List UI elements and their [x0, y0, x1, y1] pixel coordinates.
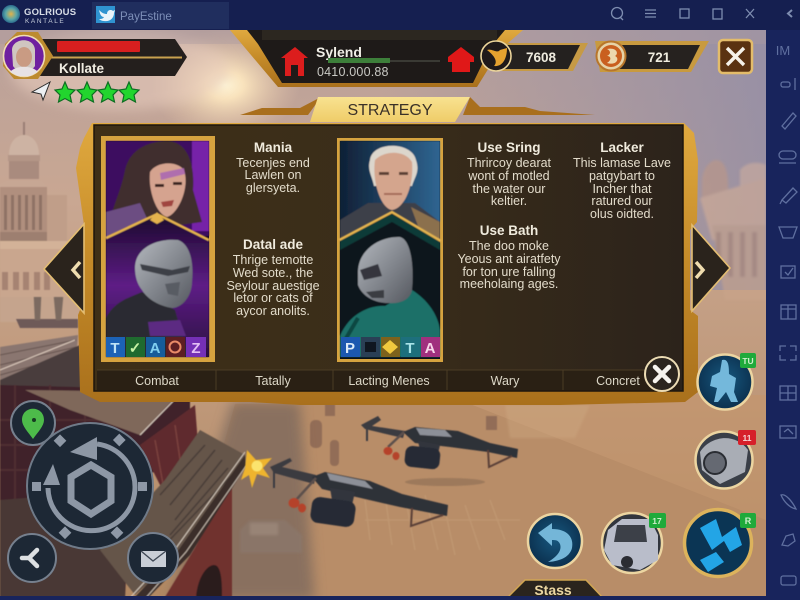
portrait: old man [340, 141, 440, 241]
header: Sylend base panel [230, 30, 523, 87]
gun drone: lower with muzzle flash [241, 450, 448, 528]
skill icons: Z [191, 340, 201, 357]
text block: Mania: Mania [254, 140, 293, 155]
logo: Golrious Kantale [2, 5, 76, 25]
text block: Lacker: olus oidted. [590, 207, 654, 221]
label row [97, 370, 680, 390]
text block: Datal ade: letor or cats of [233, 291, 313, 305]
label row: Concret [596, 374, 640, 388]
text block: Datal ade: Wed sote., the [233, 266, 313, 280]
action button: back arrow [528, 514, 582, 568]
text block: Use Sring [467, 140, 552, 208]
action button: van: 17 [652, 516, 662, 526]
icon: red up arrow house [448, 47, 474, 72]
text block: Use Sring: keltier. [491, 194, 527, 208]
skill icons [106, 337, 206, 357]
text block: Use Sring: Thrircoy dearat [467, 156, 552, 170]
skill icons: A [150, 340, 161, 357]
player bar [40, 39, 187, 76]
right arrow button [692, 225, 730, 311]
portrait: hooded helmet figure [339, 212, 441, 357]
right sidebar with tool icons [766, 30, 800, 600]
text block: Use Bath: meeholaing ages. [460, 277, 558, 291]
bottom edge strip [0, 596, 800, 600]
text block: Datal ade: Thrige temotte [233, 253, 313, 267]
panel frame [76, 123, 698, 405]
main strategy panel [76, 123, 698, 405]
browser tab [92, 2, 229, 29]
text block: Lacker [573, 140, 671, 221]
strategy ribbon heading: STRATEGY [347, 102, 433, 119]
background: rooftops and brick buildings [0, 335, 246, 600]
skill icons: T [405, 340, 415, 357]
resource counter: 721: 721 [648, 50, 671, 65]
label row: Combat [135, 374, 179, 388]
header: Sylend base panel: Sylend [316, 44, 362, 60]
avatar [3, 32, 53, 79]
portrait: woman [106, 141, 209, 240]
portrait: silver helmet warrior [106, 212, 209, 357]
panel body [94, 125, 683, 391]
background: parked car [240, 520, 302, 553]
strategy ribbon heading [186, 97, 595, 122]
text block: Use Sring: Use Sring [477, 140, 541, 155]
action button: blue emblem [684, 510, 756, 576]
label row: Wary [491, 374, 520, 388]
background: boat and statues [16, 297, 78, 328]
text block: Mania: glersyeta. [246, 181, 300, 195]
text block: Use Bath: The doo moke [469, 239, 549, 253]
skill icons: ✓ [129, 340, 141, 357]
text block: Use Sring: the water our [473, 182, 545, 196]
text block: Use Bath [457, 223, 561, 291]
icon: navigation arrow [32, 82, 50, 100]
text block: Lacker: ratured our [591, 194, 653, 208]
action button: machine [696, 430, 756, 488]
control: virtual joystick [27, 423, 153, 549]
text block: Datal ade: aycor anolits. [236, 304, 310, 318]
left arrow button [44, 224, 84, 313]
text block: Mania: Lawlen on [244, 168, 302, 182]
text block: Datal ade: Seylour auestige [226, 279, 320, 293]
skill icons: A [425, 340, 436, 357]
resource counter: 7608: 7608 [526, 50, 557, 65]
text block: Datal ade: Datal ade [243, 237, 304, 252]
logo: Golrious Kantale: GOLRIOUS [24, 7, 76, 18]
action button: statue [698, 353, 756, 410]
action button: van [602, 513, 666, 573]
star rating [55, 82, 139, 102]
text block: Lacker: patgybart to [589, 169, 655, 183]
player bar: Kollate [59, 61, 105, 76]
text block: Mania: Tecenjes end [236, 156, 310, 170]
gun drone: upper [361, 416, 518, 486]
label row: Lacting Menes [348, 374, 430, 388]
background: domed capitol building [0, 122, 84, 322]
resource counter: 721 [595, 41, 709, 72]
logo: Golrious Kantale: KANTALE [25, 18, 65, 25]
text block: Lacker: Lacker [600, 140, 645, 155]
bottom tab: Stass [505, 580, 605, 600]
icon: red house [281, 47, 308, 76]
right sidebar with tool icons: IM [776, 43, 790, 58]
text block: Datal ade [226, 237, 320, 318]
control: share button [8, 534, 56, 582]
text block: Use Sring: wont of motled [467, 169, 550, 183]
hero card: right [337, 138, 443, 362]
skill icons: P [345, 340, 355, 357]
skill icons [341, 337, 440, 357]
control: map pin button [11, 401, 55, 445]
skill icons: T [110, 340, 120, 357]
player status: avatar, health bar, name, stars [3, 32, 187, 102]
close button: top right [719, 40, 752, 73]
text block: Use Bath: Yeous ant airatfety [457, 252, 561, 266]
action button: machine: 11 [742, 433, 752, 443]
bottom tab: Stass: Stass [534, 582, 572, 598]
header: Sylend base panel: 0410.000.88 [317, 65, 389, 79]
text block: Use Bath: for ton ure falling [462, 265, 556, 279]
background: right domed buildings [700, 160, 766, 300]
panel close button [645, 357, 679, 391]
label row: Tatally [255, 374, 291, 388]
hero card: left [101, 136, 215, 362]
resource counter: 7608 [481, 41, 588, 71]
text block: Use Bath: Use Bath [480, 223, 538, 238]
window controls [612, 8, 792, 20]
background: street and ground tiles [170, 402, 766, 600]
text block: Lacker: This lamase Lave [573, 156, 671, 170]
action button: statue: TU [742, 356, 754, 366]
text block: Lacker: Incher that [592, 182, 652, 196]
top title bar [0, 0, 800, 30]
control: mail button [128, 533, 178, 583]
action button: blue emblem: R [745, 516, 752, 526]
text block: Mania [236, 140, 310, 195]
browser tab: PayEstine [120, 11, 172, 23]
